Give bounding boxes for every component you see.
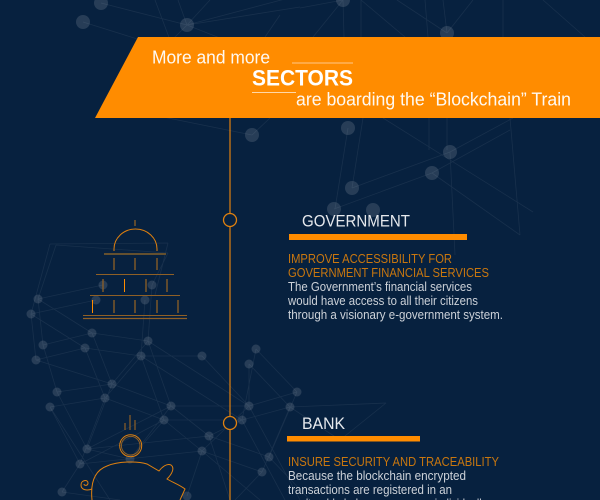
government subheading: GOVERNMENT FINANCIAL SERVICES xyxy=(288,266,489,280)
background network: lower left xyxy=(26,243,386,500)
title line 2: are boarding the “Blockchain” Train xyxy=(296,88,571,110)
bank body text: transactions are registered in an xyxy=(288,483,452,497)
bank body text: Because the blockchain encrypted xyxy=(288,469,466,483)
title banner xyxy=(95,37,600,118)
icon: piggy bank with coin xyxy=(81,415,185,500)
section: government xyxy=(287,212,503,322)
government body text xyxy=(287,280,503,322)
title keyword: SECTORS xyxy=(252,66,353,90)
banner shape xyxy=(95,37,600,118)
title accent rule top xyxy=(292,62,353,64)
bank body text xyxy=(288,469,488,500)
bank subheading: INSURE SECURITY AND TRACEABILITY xyxy=(288,455,500,469)
timeline node: government xyxy=(224,214,236,226)
timeline node: bank xyxy=(224,416,236,430)
government body text: would have access to all their citizens xyxy=(287,294,478,308)
section: bank xyxy=(287,414,500,500)
timeline line xyxy=(229,118,231,500)
government heading: GOVERNMENT xyxy=(302,212,410,230)
icon: government capitol building xyxy=(83,220,187,318)
bank heading: BANK xyxy=(302,414,346,433)
background network: top xyxy=(76,0,585,255)
government subheading: IMPROVE ACCESSIBILITY FOR xyxy=(288,252,452,266)
title line 1: More and more xyxy=(152,46,270,68)
bank orange bar xyxy=(287,436,420,442)
government subheading xyxy=(288,252,489,280)
government orange bar xyxy=(289,234,467,240)
government body text: The Government’s financial services xyxy=(288,280,472,294)
title accent rule bottom xyxy=(252,92,296,94)
government body text: through a visionary e-government system. xyxy=(288,308,503,322)
